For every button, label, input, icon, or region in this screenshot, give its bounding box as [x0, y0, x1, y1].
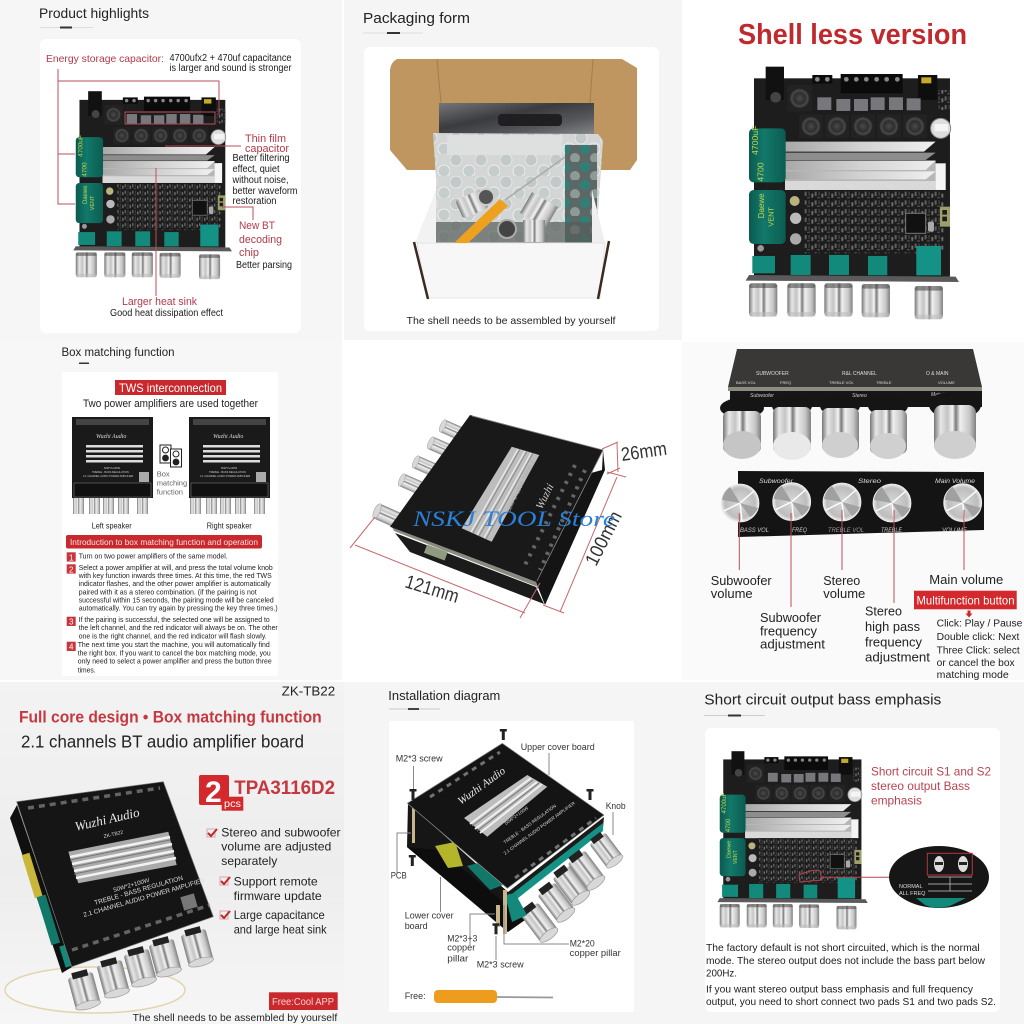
front panel with flat knobs: BASS VOL	[740, 528, 769, 534]
callout: new BT decoding chip: Better parsing	[236, 260, 292, 271]
panel: packaging form	[344, 0, 682, 340]
label: M2*20 copper pillar	[570, 939, 621, 958]
front panel with flat knobs: TREBLE VOL	[828, 528, 864, 534]
icon: box matching speakers: matching	[157, 479, 187, 488]
dimension: 121mm: 121mm	[403, 572, 461, 608]
step 4: The next time you start the machine, you will automatically find	[78, 640, 270, 649]
feature: capacitance: and large heat sink	[234, 922, 328, 936]
label: stereo volume	[823, 573, 865, 601]
title: shell less version: Shell less version	[738, 19, 967, 51]
product photo: bare board	[746, 67, 959, 319]
board: left speaker: Left speaker	[92, 521, 132, 531]
heading: packaging form: Packaging form	[363, 11, 470, 27]
callout: energy storage capacitor	[46, 53, 292, 74]
feature: capacitance: Large capacitance	[234, 908, 325, 922]
step 2: indicator flashes, and the other power amplifier is automatically	[79, 579, 271, 588]
icon: box matching speakers	[157, 445, 187, 496]
title: Full core design • Box matching function	[19, 708, 322, 726]
pedestal ring	[5, 967, 185, 1013]
step 4: the right box. If you want to cancel the box matching mode, you	[78, 648, 271, 657]
step 3: 3	[69, 618, 74, 627]
feature: firmware: firmware update	[234, 889, 322, 903]
banner: introduction: Introduction to box matching function and operation	[70, 537, 258, 547]
badge: free cool app: Free:Cool APP	[272, 996, 334, 1008]
step 3: If the pairing is successful, the selected one will be assigned to	[79, 615, 270, 624]
panel: shell less version	[738, 19, 967, 319]
callout: thin film capacitor: restoration	[232, 196, 276, 207]
highlight and leader line	[799, 870, 889, 882]
step 3: the left channel, and the red indicator will always be on. The other	[79, 623, 278, 632]
subtitle: Two power amplifiers are used together	[83, 398, 258, 410]
step 2: successful within 15 seconds, the pairing mode will be canceled	[79, 596, 274, 605]
subtitle: 2.1 channels BT audio amplifier board	[21, 732, 304, 752]
enclosure with 3D knobs: R&L CHANNEL	[842, 371, 877, 377]
label: M2*3 screw top: M2*3 screw	[396, 754, 443, 764]
board photo: TREBLE - BASS REGULATION	[94, 875, 184, 907]
board photo: Wuzhi Audio	[73, 804, 141, 834]
explanation text: The factory default is not short circuited, which is the normal	[706, 942, 980, 954]
label: M2*20 copper pillar: copper pillar	[570, 948, 621, 958]
dimension: 121mm	[350, 517, 540, 618]
callout: thin film capacitor: better waveform	[232, 186, 298, 197]
callout text: stereo output Bass	[871, 779, 970, 793]
step 4: only need to select a power amplifier and press the button three	[78, 657, 272, 666]
callout: new BT decoding chip: chip	[239, 247, 259, 259]
exploded board photo: 50W*2+100W	[504, 805, 530, 826]
enclosure with 3D knobs: Subwoofer	[750, 393, 774, 399]
step 2: automatically. You can try again by pressing the key three times.)	[79, 604, 278, 613]
step 4	[67, 640, 272, 674]
feature: volume: Stereo and subwoofer	[221, 826, 341, 840]
board photo: ZK-TB22	[103, 830, 124, 840]
screws	[409, 729, 594, 934]
callout: larger heat sink: Larger heat sink	[122, 296, 197, 308]
dimension: 100mm	[543, 472, 627, 613]
cardboard box photo	[390, 59, 637, 299]
exploded board photo: Wuzhi Audio	[456, 765, 508, 807]
step 4: times.	[78, 665, 96, 674]
label: M2*3+3 copper pillar: M2*3+3	[447, 934, 477, 944]
badge: TWS interconnection: TWS interconnection	[119, 381, 222, 395]
badge: 2 pcs	[199, 775, 243, 811]
free screwdriver	[405, 990, 553, 1003]
enclosure with 3D knobs: BASS VOL	[736, 380, 757, 385]
front panel with flat knobs: VOLUME	[942, 528, 968, 534]
label: subwoofer frequency adjustment: frequency	[760, 624, 817, 639]
step 2: paired with it as a stereo combination. (if the pairing is not	[79, 587, 257, 596]
enclosure with 3D knobs: Main Volume	[931, 392, 960, 398]
front panel with flat knobs	[721, 471, 984, 537]
leader lines	[397, 753, 613, 960]
callout: thin film capacitor	[232, 133, 298, 207]
callout text: Short circuit S1 and S2	[871, 765, 991, 779]
badge: multifunction button: Multifunction button	[916, 594, 1014, 608]
callout: energy storage capacitor: Energy storage capacitor:	[46, 53, 164, 65]
label: subwoofer frequency adjustment: Subwoofer	[760, 610, 822, 625]
dimension: 100mm: 100mm	[582, 508, 627, 569]
free screwdriver: Free:	[405, 991, 426, 1001]
button instructions: or cancel the box	[937, 658, 1015, 669]
board: left speaker	[72, 417, 153, 531]
exploded board photo: TREBLE - BASS REGULATION	[503, 803, 557, 845]
feature: volume: volume are adjusted	[221, 840, 331, 854]
front panel with flat knobs: Subwoofer	[759, 478, 794, 485]
icon: box matching speakers: Box	[157, 470, 170, 479]
enclosure with 3D knobs: TREBLE VOL	[829, 380, 854, 385]
product photo: amplifier board	[73, 91, 232, 279]
board photo: 50W*2+100W	[113, 878, 151, 894]
label: stereo high pass frequency adjustment: Stereo	[865, 604, 902, 619]
panel: short circuit output bass emphasis	[684, 682, 1024, 1024]
board in perspective: Wuzhi	[534, 482, 556, 511]
label: subwoofer volume: Subwoofer	[711, 573, 772, 588]
dimension: 26mm	[602, 439, 668, 474]
label: M2*20 copper pillar: M2*20	[570, 939, 595, 949]
feature: capacitance	[220, 908, 328, 936]
step 2: Select a power amplifier at will, and press the total volume knob	[79, 563, 273, 572]
board: right speaker: Right speaker	[207, 521, 252, 531]
enclosure with 3D knobs	[720, 349, 982, 460]
label: PCB: PCB	[391, 871, 407, 881]
label: subwoofer frequency adjustment	[760, 610, 825, 651]
callout: new BT decoding chip: New BT	[239, 220, 275, 232]
magnified inset: S1 and S2 pads	[889, 846, 989, 908]
label: stereo high pass frequency adjustment	[865, 604, 930, 665]
step 1: 1	[69, 553, 74, 562]
callout: new BT decoding chip: decoding	[239, 234, 282, 246]
enclosure with 3D knobs: SUBWOOFER	[756, 371, 789, 377]
label: subwoofer volume: volume	[711, 586, 753, 601]
enclosure with 3D knobs: FREQ	[780, 380, 791, 385]
label: upper cover board: Upper cover board	[521, 742, 595, 752]
badge: 2 pcs: 2	[205, 776, 222, 809]
button instructions: Three Click: select	[937, 645, 1020, 656]
product photo: bare board	[717, 751, 868, 929]
board in perspective	[371, 415, 605, 605]
explanation text	[706, 942, 996, 1008]
front panel with flat knobs: TREBLE	[881, 528, 903, 534]
enclosure with 3D knobs: VOLUME	[938, 380, 955, 385]
front panel with flat knobs: FREQ	[792, 528, 807, 534]
callout: larger heat sink	[110, 296, 223, 319]
model number: ZK-TB22	[282, 684, 335, 699]
callout: larger heat sink: Good heat dissipation effect	[110, 308, 223, 319]
label: M2*3+3 copper pillar: pillar	[447, 953, 468, 963]
label: stereo volume: volume	[823, 586, 865, 601]
label: stereo high pass frequency adjustment: frequency	[865, 635, 922, 650]
heading: product highlights: Product highlights	[39, 5, 149, 21]
front panel with flat knobs: Stereo	[858, 478, 881, 485]
heading: installation diagram: Installation diagram	[388, 688, 500, 703]
board photo	[10, 782, 214, 1012]
enclosure with 3D knobs: O & MAIN	[926, 371, 949, 377]
button instructions	[937, 619, 1023, 681]
callout: thin film capacitor: capacitor	[245, 143, 289, 155]
explanation text: output, you need to short connect two pads S1 and two pads S2.	[706, 996, 996, 1008]
front panel with flat knobs: Main Volume	[935, 478, 975, 485]
explanation text: 200Hz.	[706, 968, 737, 980]
exploded board photo	[407, 743, 625, 945]
step 2: with key function inwards three times. At this time, the red TWS	[78, 571, 272, 580]
enclosure with 3D knobs: TREBLE	[876, 380, 892, 385]
callout: thin film capacitor: effect, quiet	[232, 164, 280, 175]
label: stereo high pass frequency adjustment: adjustment	[865, 650, 930, 665]
callout: thin film capacitor: Thin film	[245, 133, 286, 145]
arrow	[966, 610, 972, 618]
badge: free cool app	[269, 992, 338, 1010]
caption: The shell needs to be assembled by yourself	[406, 315, 616, 327]
callout: energy storage capacitor: 4700ufx2 + 470uf capacitance	[170, 53, 292, 64]
exploded board photo: 2.1 CHANNEL AUDIO POWER AMPLIFIER	[503, 800, 577, 856]
label: main volume: Main volume	[929, 572, 1003, 587]
label: knob: Knob	[606, 801, 626, 811]
magnified inset: S1 and S2 pads: ALL FREQ	[899, 891, 926, 897]
heading: box matching function: Box matching function	[62, 347, 174, 359]
enclosure with 3D knobs: Stereo	[852, 393, 867, 399]
panel: dimensions	[350, 415, 668, 618]
label: lower cover board	[405, 911, 454, 931]
feature: firmware	[220, 875, 322, 903]
callout: thin film capacitor: Better filtering	[232, 153, 290, 164]
explanation text: mode. The stereo output does not include the bass part below	[706, 955, 985, 967]
step 2: 2	[69, 565, 74, 574]
board in perspective: 50W*2+100W TREBLE	[506, 459, 537, 513]
panel: controls	[682, 342, 1024, 681]
step 3: one is the right channel, and the red indicator will flash slowly.	[79, 631, 267, 640]
callout lines	[739, 510, 964, 607]
feature: firmware: Support remote	[234, 875, 318, 889]
button instructions: Click: Play / Pause	[937, 619, 1023, 630]
label: M2*3+3 copper pillar: copper	[447, 943, 475, 953]
label: subwoofer frequency adjustment: adjustment	[760, 636, 825, 651]
callout text: emphasis	[871, 793, 922, 807]
callout: thin film capacitor: without noise,	[232, 175, 288, 186]
feature: volume	[207, 826, 341, 868]
magnified inset: S1 and S2 pads: NORMAL	[899, 884, 923, 890]
step 1: Turn on two power amplifiers of the same model.	[79, 552, 228, 561]
panel: product overview	[0, 682, 344, 1024]
callout: energy storage capacitor: is larger and sound is stronger	[170, 63, 292, 74]
explanation text: If you want stereo output bass emphasis and full frequency	[706, 984, 974, 996]
icon: box matching speakers: function	[157, 488, 183, 496]
chip name: TPA3116D2	[234, 778, 335, 799]
step 2	[67, 563, 278, 613]
button instructions: Double click: Next	[937, 632, 1020, 643]
label: stereo volume: Stereo	[823, 573, 860, 588]
heading: Short circuit output bass emphasis	[704, 691, 941, 708]
label: subwoofer volume	[711, 573, 772, 601]
label: lower cover board: Lower cover	[405, 911, 454, 921]
watermark: NSKJ TOOL Store	[412, 506, 615, 531]
panel: installation diagram	[344, 682, 684, 1024]
dimension: 26mm: 26mm	[620, 439, 668, 466]
feature: volume: separately	[221, 854, 277, 868]
step 3	[67, 615, 278, 640]
panel: box matching function	[0, 340, 342, 680]
button instructions: matching mode	[937, 670, 1009, 681]
label: M2*3 screw bottom: M2*3 screw	[477, 960, 524, 970]
callout lines	[58, 69, 253, 296]
board: right speaker	[189, 417, 270, 531]
step 4: 4	[69, 643, 74, 652]
label: stereo high pass frequency adjustment: high pass	[865, 619, 920, 634]
label: M2*3+3 copper pillar	[447, 934, 477, 963]
badge: 2 pcs: pcs	[224, 799, 241, 810]
caption: The shell needs to be assembled by yourself	[133, 1013, 337, 1024]
board photo: 2.1 CHANNEL AUDIO POWER AMPLIFIER	[83, 877, 206, 919]
label: lower cover board: board	[405, 921, 428, 931]
panel: product highlights	[0, 0, 342, 340]
callout text	[871, 765, 991, 807]
callout: new BT decoding chip	[236, 220, 292, 271]
